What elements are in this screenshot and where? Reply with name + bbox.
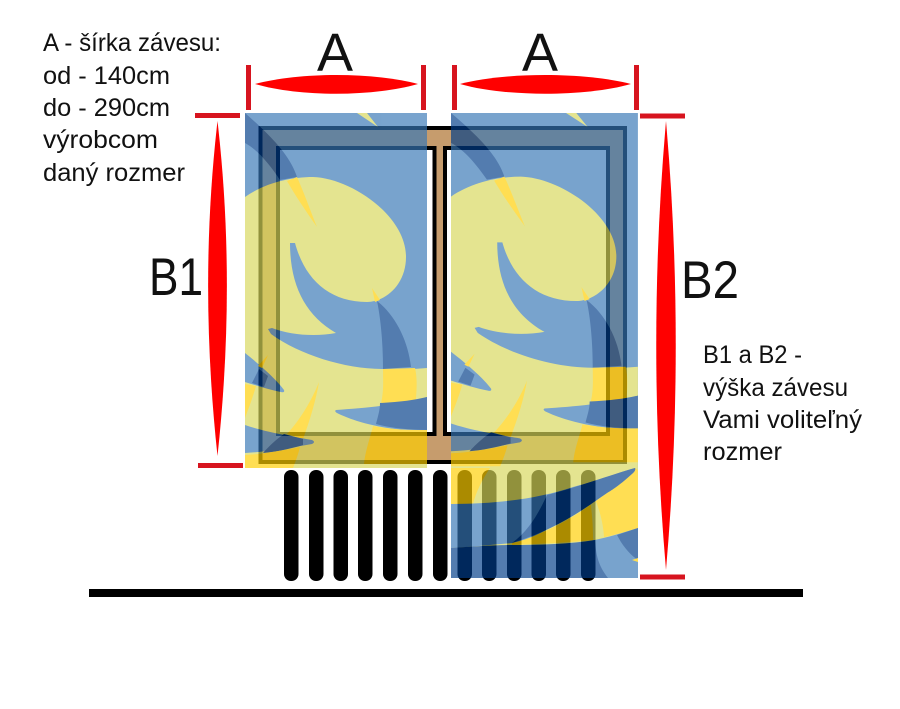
dimension A right xyxy=(452,65,639,110)
label A right: A xyxy=(522,23,558,83)
label B2: B2 xyxy=(681,251,739,310)
radiator xyxy=(284,470,596,581)
text: width note xyxy=(43,29,221,187)
text: height note xyxy=(703,341,863,466)
floor line xyxy=(89,589,803,597)
text: height note: výška závesu xyxy=(703,374,848,402)
left curtain xyxy=(245,113,427,468)
text: width note: daný rozmer xyxy=(43,159,185,187)
dimension B1 xyxy=(195,113,243,468)
text: height note: rozmer xyxy=(703,438,782,466)
right curtain xyxy=(451,113,638,610)
dimension B2 xyxy=(640,114,685,580)
text: width note: A - šírka závesu: xyxy=(43,29,221,57)
text: height note: Vami voliteľný xyxy=(703,406,863,434)
text: width note: výrobcom xyxy=(43,126,158,154)
text: height note: B1 a B2 - xyxy=(703,341,802,369)
diagram: curtain measurements xyxy=(43,32,862,597)
label A left: A xyxy=(317,23,353,83)
label B1: B1 xyxy=(149,248,203,307)
window frame xyxy=(260,128,625,462)
text: width note: od - 140cm xyxy=(43,62,170,90)
text: width note: do - 290cm xyxy=(43,94,170,122)
dimension A left xyxy=(246,65,426,110)
